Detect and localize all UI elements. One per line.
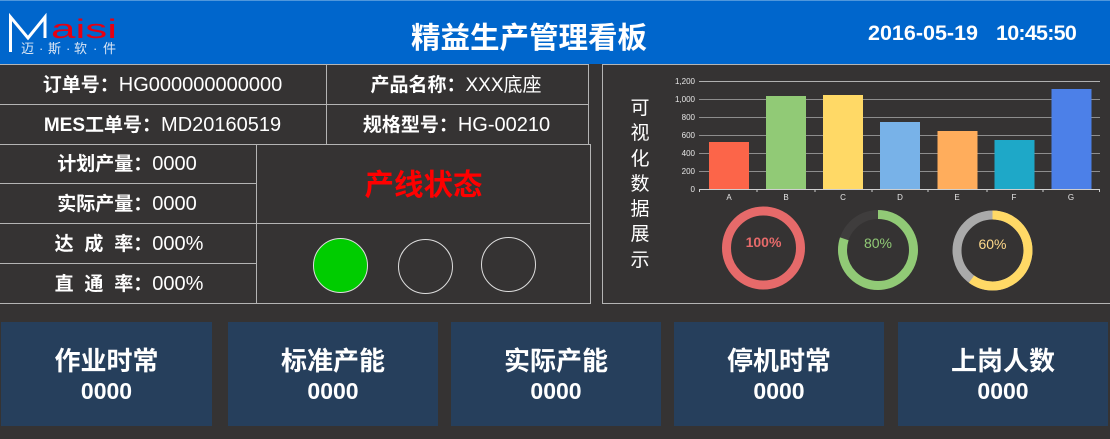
vertical label <box>630 98 650 271</box>
bar chart: E <box>954 193 960 202</box>
bar chart: 800 <box>682 113 696 122</box>
date and time: 2016-05-19 <box>868 21 978 45</box>
date and time: 10:45:50 <box>996 21 1076 45</box>
bar chart: 1,000 <box>675 95 696 104</box>
bar chart: C <box>840 193 846 202</box>
panel: line status <box>256 144 591 304</box>
status light: off <box>481 237 536 292</box>
bar chart <box>675 77 1100 202</box>
title: 精益生产管理看板 <box>411 22 647 55</box>
planned output: 计划产量：0000 <box>57 153 197 175</box>
card: downtime: 0000 <box>753 378 805 404</box>
gauge: 80%: 80% <box>864 235 892 251</box>
vertical label: 示 <box>630 250 650 271</box>
card: staff on duty <box>898 322 1108 426</box>
bar chart: 400 <box>682 149 696 158</box>
vertical label: 化 <box>630 149 650 170</box>
line status heading: 产线状态 <box>364 169 482 202</box>
card: downtime <box>674 322 884 426</box>
card: actual capacity <box>451 322 661 426</box>
vertical label: 数 <box>630 174 650 195</box>
gauge: 100% <box>726 211 800 285</box>
vertical label: 据 <box>630 199 650 220</box>
achievement rate: 达 成 率：000% <box>55 233 203 255</box>
vertical label: 视 <box>630 123 650 144</box>
card: staff on duty: 0000 <box>977 378 1029 404</box>
bar chart: B <box>783 193 789 202</box>
gauge: 80% <box>842 214 914 286</box>
logo <box>9 12 117 56</box>
bar chart: 0 <box>691 185 696 194</box>
bar chart: A <box>726 193 732 202</box>
bar chart: 600 <box>682 131 696 140</box>
logo: aisi <box>51 14 117 44</box>
card: downtime: 停机时常 <box>727 346 831 376</box>
bar chart: 200 <box>682 167 696 176</box>
logo: 迈·斯·软·件 <box>21 41 116 56</box>
order number: 订单号：HG000000000000 <box>43 74 282 96</box>
card: actual capacity: 0000 <box>530 378 582 404</box>
header bar <box>0 0 1110 64</box>
card: staff on duty: 上岗人数 <box>951 346 1055 376</box>
card: working hours <box>1 322 212 426</box>
status light: green <box>313 238 368 293</box>
card: actual capacity: 实际产能 <box>504 346 608 376</box>
MES work order: MES工单号：MD20160519 <box>44 114 281 136</box>
vertical label: 可 <box>630 98 650 119</box>
panel: production figures <box>0 144 256 304</box>
card: working hours: 0000 <box>81 378 132 404</box>
date and time <box>868 21 1076 45</box>
card: standard capacity: 0000 <box>307 378 359 404</box>
bar chart: 1,200 <box>675 77 696 86</box>
card: standard capacity: 标准产能 <box>281 346 385 376</box>
actual output: 实际产量：0000 <box>57 193 197 215</box>
specification: 规格型号：HG-00210 <box>363 114 550 136</box>
panel: visual data <box>602 64 1110 304</box>
gauge: 60% <box>957 215 1028 286</box>
vertical label: 展 <box>630 224 650 245</box>
bar chart: D <box>897 193 903 202</box>
product name: 产品名称：XXX底座 <box>370 75 542 96</box>
donut gauges <box>722 206 1032 290</box>
card: working hours: 作业时常 <box>54 346 158 376</box>
first pass rate: 直 通 率：000% <box>55 273 203 295</box>
panel: order info table <box>0 64 589 144</box>
gauge: 60%: 60% <box>978 236 1007 252</box>
gauge: 100%: 100% <box>746 234 782 250</box>
status light: off <box>398 239 453 294</box>
bar chart: F <box>1012 193 1017 202</box>
bar chart: G <box>1068 193 1074 202</box>
card: standard capacity <box>228 322 438 426</box>
